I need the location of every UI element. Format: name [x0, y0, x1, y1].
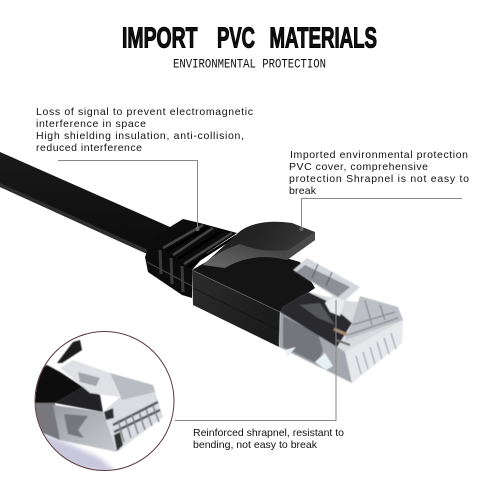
connector body [192, 245, 315, 347]
text block: reinforced shrapnel: Reinforced shrapnel, resistant to [193, 427, 344, 439]
text block: PVC cover: PVC cover, comprehensive [289, 161, 428, 173]
title: MATERIALS [270, 22, 377, 54]
leader dot: shielding [196, 227, 200, 231]
text block: shielding: Loss of signal to prevent electromagnetic [36, 106, 253, 118]
subtitle: ENVIRONMENTAL PROTECTION [173, 56, 326, 72]
text block: PVC cover: break [289, 185, 317, 197]
leader line: reinforced shrapnel [175, 300, 336, 420]
transparent plug [279, 258, 403, 383]
connector latch [203, 222, 315, 268]
text block: reinforced shrapnel [193, 427, 344, 451]
title: PVC [217, 22, 255, 54]
text block: shielding: High shielding insulation, anti-collision, [36, 130, 244, 142]
text block: shielding: interference in space [36, 118, 146, 130]
title: IMPORT [122, 22, 198, 54]
text block: shielding: reduced interference [36, 142, 142, 154]
leader dot: PVC cover [300, 227, 304, 231]
flat cable [0, 152, 170, 254]
title [122, 22, 377, 54]
leader line: shielding [58, 160, 198, 229]
text block: reinforced shrapnel: bending, not easy to break [193, 439, 318, 451]
leader line: PVC cover [302, 198, 462, 228]
text block: shielding [36, 106, 253, 154]
connector boot [145, 219, 237, 298]
text block: PVC cover: protection Shrapnel is not easy to [289, 173, 469, 185]
circular inset [30, 332, 174, 475]
text block: PVC cover: Imported environmental protection [290, 149, 468, 161]
text block: PVC cover [289, 149, 469, 197]
